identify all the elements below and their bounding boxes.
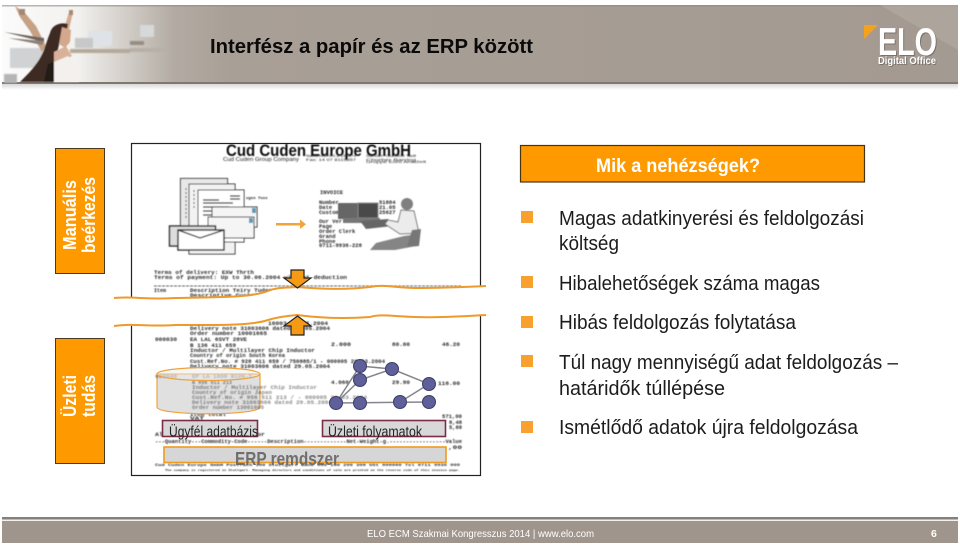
bullet: faulty processing: Hibás feldolgozás folytatása — [559, 312, 797, 334]
invoice line items text: 000030 — [155, 337, 177, 343]
footer bar: ELO ECM Szakmai Kongresszus 2014 | www.elo.com — [367, 528, 594, 540]
invoice line items text: EA LAL 6SVT 28VE — [190, 337, 247, 343]
invoice details text: 25627 — [379, 209, 396, 216]
ELO Digital Office logo: ELO — [879, 22, 938, 65]
icon: operator at computer — [338, 198, 421, 250]
invoice line items text: 29.90 — [392, 380, 410, 386]
invoice details text: Page — [319, 223, 333, 230]
invoice letterhead: Cud Cuden Europe GmbH — [226, 142, 411, 160]
icon: customer database cylinder: Order number 13001665 — [192, 405, 264, 411]
bullet list: difficulties — [521, 208, 899, 439]
side label: Manuális beérkezés: Manuális — [60, 180, 80, 250]
invoice letterhead: Cud Cuden Group Company — [223, 157, 300, 163]
ELO Digital Office logo: Digital Office — [879, 56, 937, 68]
invoice line items text: Cust.Ref.No. # 928 411 659 / 750885/1 - 000005 26.03.2004 — [190, 359, 385, 365]
invoice line items text: Item total — [190, 412, 226, 418]
invoice line items text: 5,88 — [449, 425, 462, 431]
icon: customer database cylinder: 000040 — [155, 374, 177, 380]
arrow: documents to operator — [276, 220, 306, 229]
invoice line items text: 80.00 — [392, 342, 410, 348]
invoice line items text: ---Quantity---Commodity-Code------Description-------------Net-Weight-g.-----------------Value — [155, 439, 462, 445]
invoice terms text: Terms of delivery: EXW Thrth — [154, 270, 254, 276]
icon: stack of documents and envelopes: ugon fuse — [246, 196, 268, 201]
invoice details text: Grand — [319, 233, 336, 240]
bullet: error possibilities: Hibalehetőségek száma magas — [559, 273, 820, 295]
icon: customer database cylinder: Inductor / Multilayer Chip Inductor — [192, 385, 317, 391]
torn paper gap — [114, 286, 486, 326]
panel heading: Mik a nehézségek?: Mik a nehézségek? — [596, 155, 760, 177]
panel: scanned invoice with ERP overlay — [114, 142, 486, 476]
invoice line items text: 46.20 — [442, 342, 460, 348]
ELO Digital Office logo: ELO — [878, 21, 937, 64]
bullet: extraction cost: Magas adatkinyerési és feldolgozási — [559, 208, 864, 230]
label: Üzleti folyamatok: Üzleti folyamatok — [328, 422, 423, 440]
invoice line items text: Delivery note 31003606 dated 29.05.2004 — [190, 364, 330, 370]
invoice letterhead: Sander: Gud000 Tadt — [366, 153, 417, 158]
invoice details text: INVOICE — [320, 189, 344, 196]
invoice details text: Phone — [319, 238, 336, 245]
invoice line items text: B 136 411 659 — [190, 343, 236, 349]
bullet: too much data: határidők túllépése — [559, 378, 725, 400]
label: ERP remdszer: ERP remdszer — [235, 449, 339, 469]
side label: Üzleti tudás: tudás — [79, 375, 99, 417]
title: Interfész a papír és az ERP között — [210, 35, 533, 58]
invoice line items text: Delivery note 31003606 dated 29.05.2004 — [190, 326, 330, 332]
ELO Digital Office logo: Digital Office — [878, 55, 936, 67]
panel heading: Mik a nehézségek? — [520, 146, 864, 182]
icon: customer database cylinder — [155, 368, 367, 414]
bullet: extraction cost: költség — [559, 233, 619, 255]
invoice letterhead: Gruppe Euro Anschrit — [366, 159, 427, 164]
invoice line items text: ,00 — [448, 445, 462, 451]
invoice details text — [319, 189, 396, 249]
chart: business process network — [330, 360, 436, 410]
icon: customer database cylinder: Delivery note 31003606 dated 29.05.2004 — [192, 400, 332, 406]
side label: Üzleti tudás — [56, 338, 104, 464]
invoice line items text: Order number 10001665 — [190, 331, 267, 337]
side label: Üzleti tudás: Üzleti — [60, 375, 80, 417]
icon: customer database cylinder: Cust.Ref.No. # 956 511 213 / - 000005 26.03.2004 — [192, 395, 367, 401]
torn edge lower — [114, 315, 486, 326]
invoice line items text — [155, 321, 462, 472]
invoice terms text: Item — [154, 288, 166, 294]
invoice details text: Order Clerk — [319, 228, 356, 235]
invoice line items text: 571,00 — [442, 414, 462, 420]
invoice details text: Number — [319, 199, 339, 206]
icon: customer database cylinder: EP LA 1608 B12N-T — [192, 374, 252, 380]
invoice terms text: Terms of payment: Up to 30.06.2004 without deduction — [154, 275, 347, 281]
torn edge upper — [114, 286, 486, 299]
footer bar: 6 — [931, 528, 937, 540]
invoice line items text: Inductor / Multilayer Chip Inductor — [190, 348, 315, 354]
invoice line items text: 10003 26.03.2004 — [268, 321, 328, 327]
bullet: too much data: Túl nagy mennyiségű adat feldolgozás – — [559, 352, 899, 374]
side label: Manuális beérkezés: beérkezés — [79, 177, 99, 253]
icon: customer database cylinder: B 956 511 213 — [192, 380, 232, 386]
header banner — [2, 5, 958, 90]
invoice line items text: 116.00 — [438, 381, 460, 387]
invoice details text: Custom — [319, 209, 340, 216]
bullet: extraction cost — [521, 208, 864, 255]
arrow: down into system — [284, 270, 311, 288]
arrow: up from system — [284, 316, 311, 335]
invoice terms text: Description Teiry Tuden — [190, 288, 272, 294]
invoice line items text: Al Tel: Quantity: Amount Mor — [155, 432, 265, 438]
invoice line items text: 8,48 — [449, 420, 462, 426]
invoice line items text: 4.060 — [331, 380, 349, 386]
invoice details text: Our Ver — [319, 218, 342, 225]
invoice letterhead: Name:nnb 0.0.6 158574 — [306, 153, 357, 158]
banner photo: woman with flying hair and office motifs — [4, 6, 166, 83]
ELO Digital Office logo — [864, 21, 938, 68]
invoice line items text: The company is registered in Stuttgart. Managing directors and conditions of sale are printed on the reverse side of this invoice page. — [165, 468, 460, 472]
bullet: too much data — [521, 352, 899, 400]
side label: Manuális beérkezés — [56, 148, 104, 274]
invoice details text: 51884 — [379, 199, 396, 206]
label: Ügyfél adatbázis: Ügyfél adatbázis — [169, 422, 258, 440]
invoice line items text: 2.000 — [331, 342, 351, 348]
bullet: repeated data: Ismétlődő adatok újra feldolgozása — [559, 417, 859, 439]
label: Ügyfél adatbázis — [162, 420, 258, 440]
invoice details text: 21.05 — [379, 204, 396, 211]
invoice letterhead: Fax: 14 07 8115857 — [306, 157, 357, 162]
invoice terms text — [154, 270, 462, 299]
invoice terms text: Descriptive Customs — [190, 293, 262, 299]
invoice letterhead: Chorber Barring — [366, 157, 416, 162]
invoice details text: Date — [319, 204, 333, 211]
invoice line items text: Country of origin South Korea — [190, 353, 285, 359]
invoice details text: 0711-9936-228 — [319, 242, 363, 249]
icon: stack of documents and envelopes — [170, 178, 268, 254]
footer bar — [2, 517, 958, 543]
invoice line items text: Cud Cuden Europe GmbH Postfach 100 Stuttgart Bank 000 100 200 300 USt 000000 Tel 0711 9936 000 — [155, 463, 460, 468]
icon: customer database cylinder: Country of origin Japan — [192, 390, 272, 396]
invoice line items text: VAT — [190, 416, 204, 422]
label: ERP remdszer — [164, 447, 446, 469]
